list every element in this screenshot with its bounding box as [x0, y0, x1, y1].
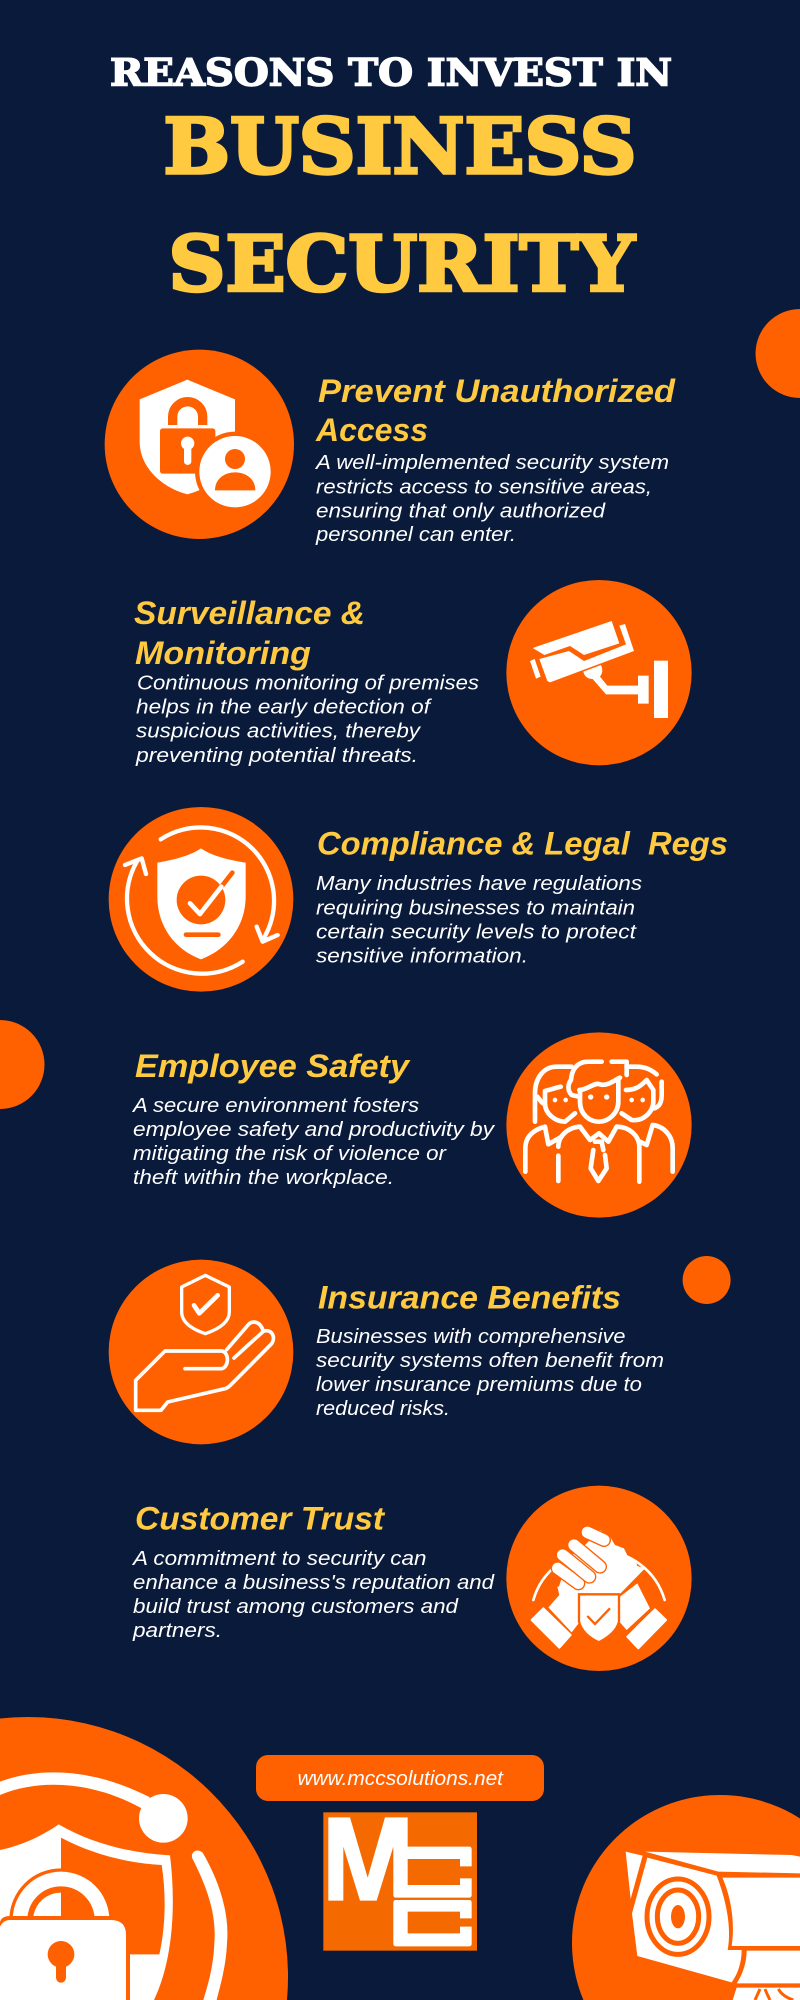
body text: A secure environment fosters	[131, 1094, 419, 1117]
icon: shield with check and cycle arrows	[109, 807, 293, 992]
heading: Surveillance &	[134, 595, 365, 631]
icon: large shield lock, bottom left	[0, 1717, 288, 2000]
body text: lower insurance premiums due to	[316, 1373, 642, 1396]
panel: prevent unauthorized access	[105, 350, 677, 546]
body text	[135, 672, 479, 767]
body text: Businesses with comprehensive	[316, 1325, 626, 1348]
body text: helps in the early detection of	[136, 696, 433, 718]
panel: compliance and legal regs	[109, 807, 728, 992]
body text: employee safety and productivity by	[133, 1118, 496, 1141]
body text	[316, 872, 642, 968]
icon: hand holding shield	[109, 1260, 293, 1444]
icon: security camera	[506, 580, 692, 765]
heading: Prevent Unauthorized	[318, 373, 677, 409]
decorative circle: top right	[756, 309, 800, 398]
body text: certain security levels to protect	[316, 920, 637, 944]
body text: preventing potential threats.	[135, 744, 418, 767]
icon: shield with lock and person	[105, 350, 294, 539]
body text: sensitive information.	[316, 944, 528, 968]
icon: clasped hands with shield	[506, 1486, 692, 1671]
decorative circle: small right	[683, 1256, 731, 1304]
body text: A well-implemented security system	[314, 451, 669, 474]
body text: enhance a business's reputation and	[133, 1571, 495, 1594]
icon: large security camera, bottom right	[572, 1795, 800, 2000]
title: BUSINESS	[164, 102, 636, 191]
body text	[131, 1094, 496, 1189]
body text: personnel can enter.	[315, 523, 516, 546]
heading: Access	[315, 412, 428, 448]
body text: ensuring that only authorized	[316, 500, 606, 522]
panel: customer trust	[131, 1486, 692, 1671]
panel: insurance benefits	[109, 1260, 664, 1444]
title: REASONS TO INVEST IN	[110, 50, 672, 94]
panel: employee safety	[131, 1032, 692, 1218]
body text: security systems often benefit from	[316, 1349, 664, 1372]
heading: Insurance Benefits	[318, 1280, 621, 1316]
body text: partners.	[132, 1619, 222, 1642]
website pill: www.mccsolutions.net	[298, 1768, 504, 1790]
icon: three employees	[506, 1032, 692, 1218]
title: SECURITY	[168, 220, 635, 308]
body text: suspicious activities, thereby	[136, 720, 422, 742]
body text: restricts access to sensitive areas,	[316, 476, 652, 498]
heading: Monitoring	[135, 635, 311, 671]
heading: Compliance & Legal Regs	[317, 826, 728, 862]
body text	[316, 1325, 664, 1420]
body text: Continuous monitoring of premises	[137, 672, 479, 694]
logo: MCC	[323, 1812, 477, 1951]
body text: build trust among customers and	[133, 1595, 459, 1618]
body text: Many industries have regulations	[316, 872, 642, 895]
decorative circle: mid left	[0, 1020, 44, 1109]
body text: mitigating the risk of violence or	[133, 1142, 447, 1165]
body text	[314, 451, 669, 546]
body text: A commitment to security can	[131, 1547, 426, 1570]
body text: requiring businesses to maintain	[316, 896, 635, 920]
panel: surveillance and monitoring	[134, 580, 692, 767]
body text	[131, 1547, 495, 1642]
heading: Customer Trust	[135, 1500, 385, 1536]
heading	[134, 595, 365, 671]
body text: reduced risks.	[316, 1397, 450, 1420]
title	[110, 50, 672, 308]
heading: Employee Safety	[135, 1048, 411, 1084]
heading	[315, 373, 677, 448]
body text: theft within the workplace.	[133, 1166, 394, 1189]
website pill	[256, 1755, 544, 1801]
